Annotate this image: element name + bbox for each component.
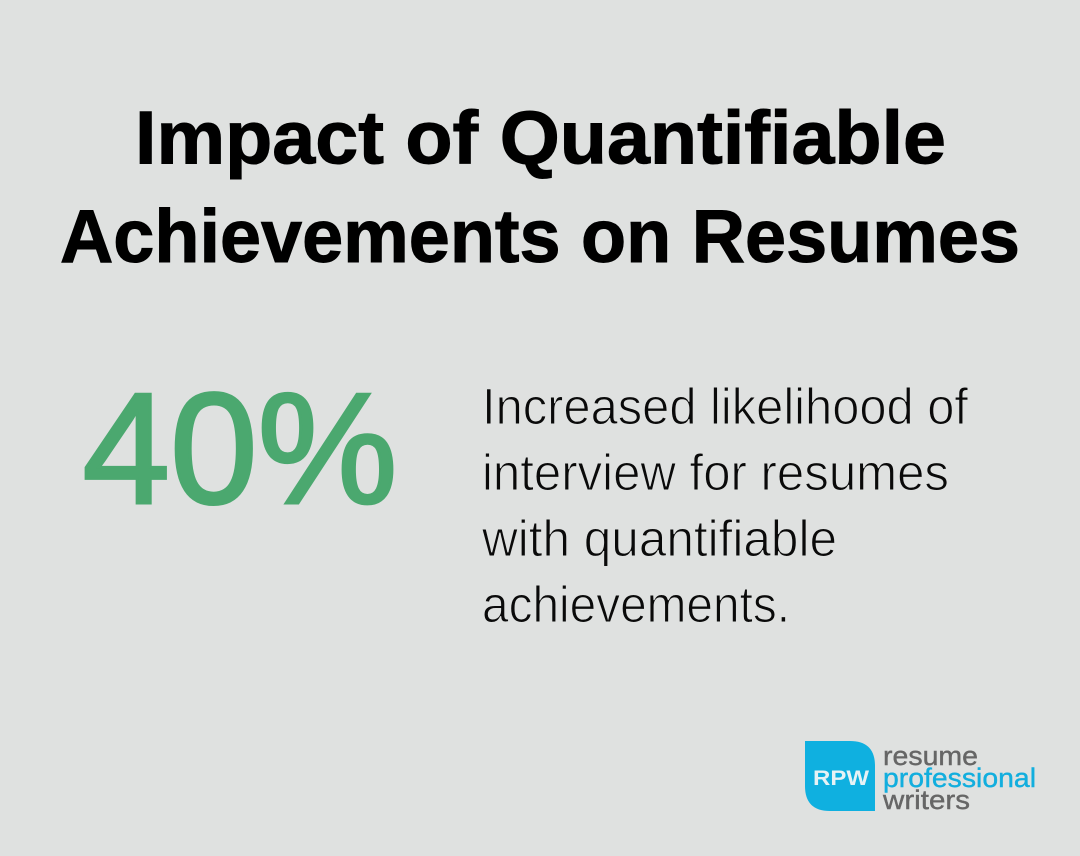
logo wordmark: professional [883,763,1036,793]
title: Achievements on Resumes [60,194,1020,278]
logo wordmark: resume [883,741,978,771]
logo badge [805,741,875,811]
title [60,96,1020,278]
stat description [481,378,969,633]
title: Impact of Quantifiable [135,96,946,180]
logo badge: RPW [813,767,869,790]
logo wordmark: writers [882,785,970,815]
stat description: achievements. [482,576,790,633]
stat description: interview for resumes [482,444,949,501]
big stat: 40%: 40% [82,361,398,537]
stat description: with quantifiable [481,510,837,567]
stat description: Increased likelihood of [482,378,969,435]
logo: resume professional writers [805,741,1036,815]
logo wordmark [882,741,1036,815]
